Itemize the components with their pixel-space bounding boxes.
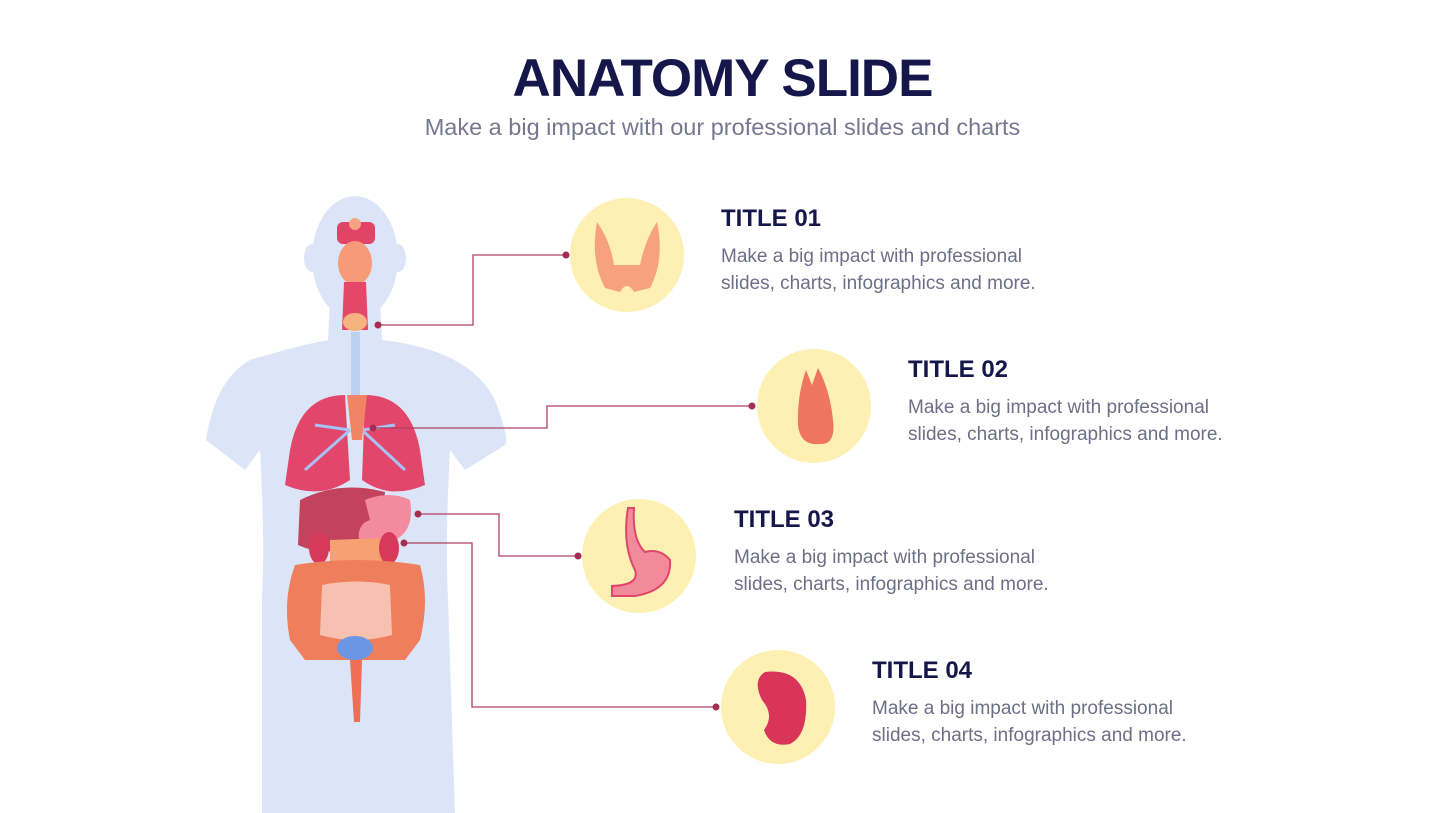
text block 2: Make a big impact with professional <box>908 397 1209 418</box>
text block 2: slides, charts, infographics and more. <box>908 424 1223 445</box>
text block 1 <box>721 205 1036 294</box>
text block 3: slides, charts, infographics and more. <box>734 574 1049 595</box>
text block 2 <box>908 356 1223 445</box>
subtitle: Make a big impact with our professional slides and charts <box>425 114 1020 140</box>
text block 3 <box>734 506 1049 595</box>
body silhouette <box>206 196 506 813</box>
lungs <box>285 395 425 491</box>
text block 3: Make a big impact with professional <box>734 547 1035 568</box>
text block 3: TITLE 03 <box>734 506 834 533</box>
text block 4: slides, charts, infographics and more. <box>872 725 1187 746</box>
text block 1: Make a big impact with professional <box>721 246 1022 267</box>
icon: kidney <box>721 650 835 764</box>
text block 2: TITLE 02 <box>908 356 1008 383</box>
icon: stomach <box>582 499 696 613</box>
text block 4: TITLE 04 <box>872 657 972 684</box>
liver and stomach <box>298 488 411 568</box>
icon: tooth-like organ <box>757 349 871 463</box>
text block 4: Make a big impact with professional <box>872 698 1173 719</box>
text block 1: TITLE 01 <box>721 205 821 232</box>
intestines <box>287 560 425 722</box>
text block 4 <box>872 657 1187 746</box>
title: ANATOMY SLIDE <box>513 49 932 108</box>
connectors <box>373 255 752 707</box>
organs: brain/throat <box>337 218 375 402</box>
icon: thyroid <box>570 198 684 312</box>
text block 1: slides, charts, infographics and more. <box>721 273 1036 294</box>
